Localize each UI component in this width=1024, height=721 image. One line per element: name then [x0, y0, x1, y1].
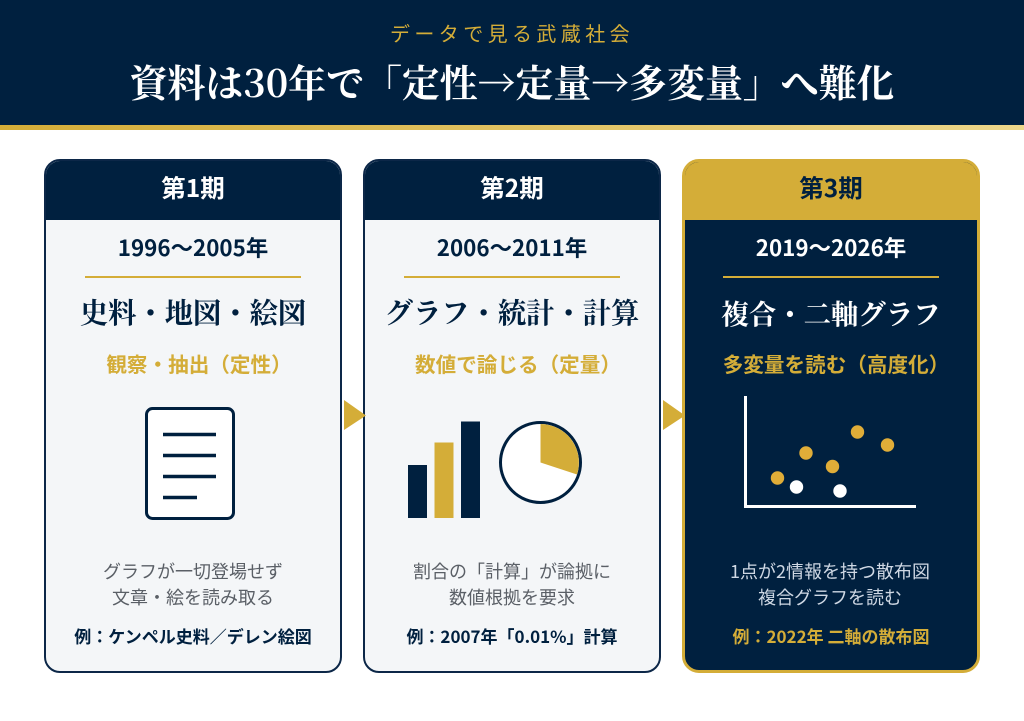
period 2 years: 2006〜2011年 [437, 231, 587, 263]
header gold rule [0, 125, 1024, 130]
period 1 header [44, 159, 342, 220]
header band [0, 0, 1024, 125]
icon: bar and pie charts [408, 421, 582, 518]
arrow: period 1 to 2 [344, 400, 366, 430]
icon: scatter plot [744, 396, 916, 508]
period 3 subheading: 多変量を読む（高度化） [723, 348, 949, 378]
period 2 description: 数値根拠を要求 [449, 584, 575, 610]
period 1 header: 第1期 [161, 170, 225, 205]
eyebrow label: データで見る武蔵社会 [390, 18, 634, 47]
panel: period 2 [363, 159, 661, 673]
period 2 header [363, 159, 661, 220]
period 1 example: 例：ケンペル史料／デレン絵図 [74, 623, 312, 648]
period 1 description: グラフが一切登場せず [103, 558, 283, 584]
period 1 description [103, 558, 283, 610]
period 1 years: 1996〜2005年 [118, 231, 268, 263]
period 3 header: 第3期 [799, 170, 863, 205]
period 2 description [413, 558, 611, 610]
panel: period 1 [44, 159, 342, 673]
period 3 description: 1点が2情報を持つ散布図 [730, 558, 930, 584]
arrow: period 2 to 3 [663, 400, 682, 430]
period 3 example: 例：2022年 二軸の散布図 [732, 623, 929, 648]
period 2 description: 割合の「計算」が論拠に [413, 558, 611, 584]
period 1 subheading: 観察・抽出（定性） [106, 348, 292, 378]
period 3 description [730, 558, 930, 610]
period 2 header: 第2期 [480, 170, 544, 205]
period 2 heading: グラフ・統計・計算 [385, 291, 639, 332]
period 1 heading: 史料・地図・絵図 [80, 291, 306, 332]
title: 資料は30年で「定性→定量→多変量」へ難化 [130, 53, 894, 108]
period 2 example: 例：2007年「0.01%」計算 [406, 623, 618, 648]
period 3 heading: 複合・二軸グラフ [721, 292, 941, 332]
period 2 subheading: 数値で論じる（定量） [415, 348, 621, 378]
period 3 description: 複合グラフを読む [758, 584, 902, 610]
panel: period 3 [682, 159, 980, 673]
period 1 description: 文章・絵を読み取る [112, 584, 274, 610]
period 3 header [682, 159, 980, 220]
period 3 years: 2019〜2026年 [756, 231, 906, 263]
icon: document [145, 407, 235, 520]
